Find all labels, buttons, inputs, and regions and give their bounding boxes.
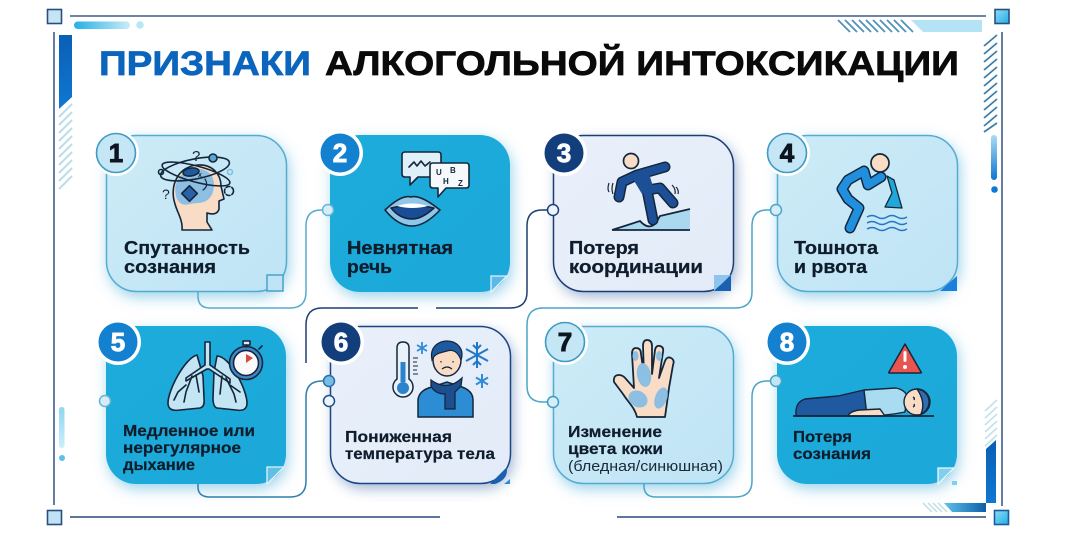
icon: speech and lips: B [450,166,456,175]
panel: 5 slow breathing [95,319,286,484]
title: АЛКОГОЛЬНОЙ ИНТОКСИКАЦИИ [325,44,959,83]
label 7 [568,424,723,475]
label 5: Медленное или [123,423,255,440]
icon: speech and lips: H [443,177,449,186]
badge 4: 4 [780,138,795,168]
icon: warning triangle [889,344,921,373]
badge 5: 5 [111,327,125,357]
panel: 3 loss of coordination [541,130,734,292]
label 3: Потеря [569,238,639,258]
icon: hand with pale patches [614,340,674,417]
badge 3: 3 [557,138,571,168]
connector: card 2 to card 3 and card 6 [306,204,558,363]
corner square 1 [267,275,283,291]
corner fold 2 [491,276,507,292]
label 7: цвета кожи [568,441,663,458]
label 8: Потеря [793,429,852,446]
connector: card 1 to card 2 [198,204,334,308]
label 4: Тошнота [794,238,879,258]
label 1: сознания [124,257,216,277]
badge 6 [318,319,364,365]
badge 7 [542,319,588,365]
title: ПРИЗНАКИ [99,45,311,83]
label 2: речь [347,257,392,277]
corner fold 4 [940,276,957,291]
icon: lying person [793,388,934,416]
label 2: Невнятная [347,238,453,258]
icon: confused head: ? [192,148,200,165]
icon: thermometer, freezing person and snow [393,341,488,417]
icon: vomiting person [842,154,907,230]
icon: speech and lips: U [436,168,442,177]
panel: 6 low temperature [318,319,510,484]
label 8 [793,429,871,463]
label 6: Пониженная [345,429,452,446]
badge 5 [95,319,141,365]
badge 6: 6 [334,327,348,357]
label 2 [347,238,453,277]
icon: falling person [608,154,690,230]
badge 2: 2 [333,138,347,168]
badge 4 [764,130,810,176]
label 5: нерегулярное [123,440,241,457]
panel: 7 skin color change [542,319,734,484]
panel: 8 loss of consciousness [764,319,957,485]
label 1 [124,238,250,277]
label 5: дыхание [123,457,195,474]
icon: confused head [158,148,234,230]
panel: 4 nausea [764,130,958,292]
connector: card 7 to card 8 [644,376,782,497]
icon: confused head: ? [162,186,170,202]
label 7: (бледная/синюшная) [568,458,723,475]
badge 8: 8 [780,327,794,357]
label 4: и рвота [794,257,868,277]
panel: 2 slurred speech [317,130,510,292]
label 5 [123,423,255,474]
badge 7: 7 [558,327,572,357]
label 1: Спутанность [124,238,250,258]
connector: card 3 to card 4 and card 7 [527,204,782,408]
label 6: температура тела [345,446,495,463]
label 3 [569,238,703,277]
icon: speech and lips [385,152,469,226]
badge 3 [541,130,587,176]
badge 1: 1 [109,138,123,168]
title [99,44,959,83]
icon: speech and lips: Z [458,179,463,188]
corner fold 8 [938,468,957,485]
label 3: координации [569,257,703,277]
label 7: Изменение [568,424,662,441]
label 6 [345,429,495,463]
badge 2 [317,130,363,176]
icon: lungs and stopwatch [168,341,262,410]
badge 1 [93,130,139,176]
icon: confused head: x [198,172,202,179]
corner fold 6 [490,467,510,484]
corner fold 3 [714,275,731,291]
label 4 [794,238,879,277]
badge 8 [764,319,810,365]
panel: 1 confusion [93,130,286,292]
label 8: сознания [793,446,871,463]
corner fold 5 [267,467,284,484]
connector: card 5 to card 6 [100,376,334,497]
